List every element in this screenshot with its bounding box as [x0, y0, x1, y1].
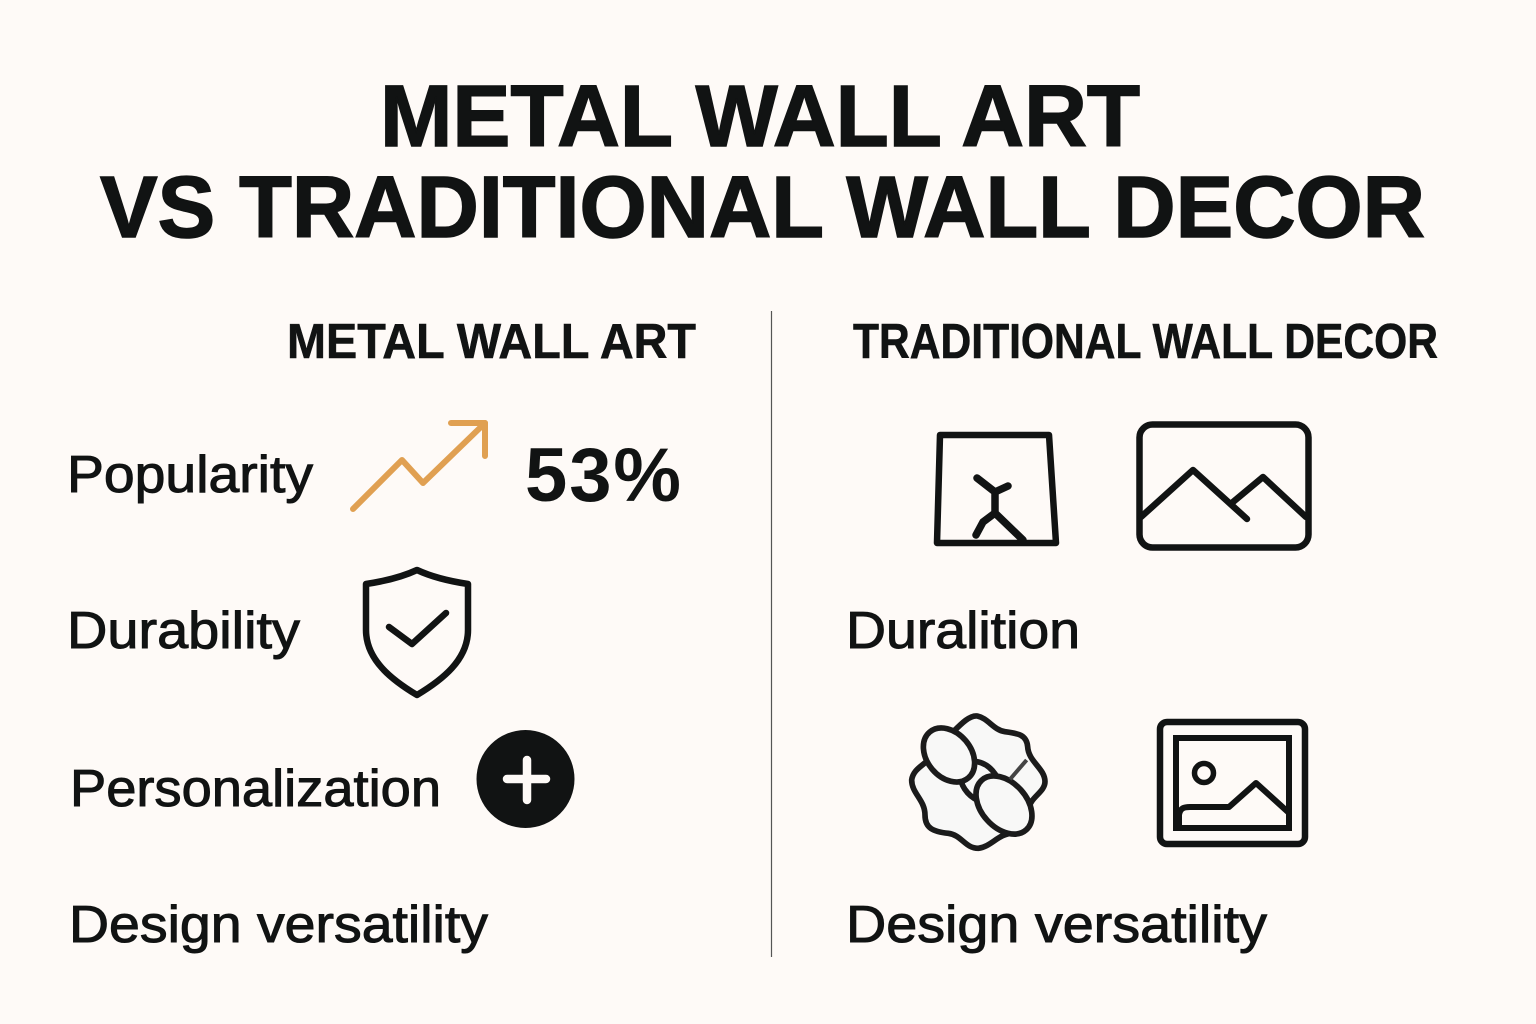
stat: 53 percent: 53%: [525, 433, 681, 518]
heading: metal wall art: METAL WALL ART: [287, 315, 696, 369]
title: [100, 68, 1425, 256]
icon: rising trend arrow: [353, 423, 485, 509]
icon: landscape picture: [1140, 424, 1308, 548]
label: personalization: Personalization: [70, 760, 441, 818]
label: durability: Durability: [67, 602, 300, 660]
panel: metal wall art: [67, 315, 696, 954]
label: popularity: Popularity: [67, 446, 313, 504]
label: design versatility: Design versatility: [69, 896, 488, 954]
icon: framed figure: [937, 435, 1056, 543]
icon: organic blob with ovals: [912, 716, 1045, 848]
heading: traditional wall decor: TRADITIONAL WALL DECOR: [853, 315, 1438, 369]
title: VS TRADITIONAL WALL DECOR: [100, 159, 1425, 256]
icon: plus in circle: [476, 730, 574, 828]
icon: shield with check: [366, 570, 468, 695]
icon: photo in frame: [1160, 722, 1305, 844]
title: METAL WALL ART: [380, 68, 1140, 165]
label: design versatility right: Design versatility: [846, 896, 1267, 954]
label: duralition: Duralition: [846, 602, 1080, 660]
panel: traditional wall decor: [846, 315, 1438, 954]
